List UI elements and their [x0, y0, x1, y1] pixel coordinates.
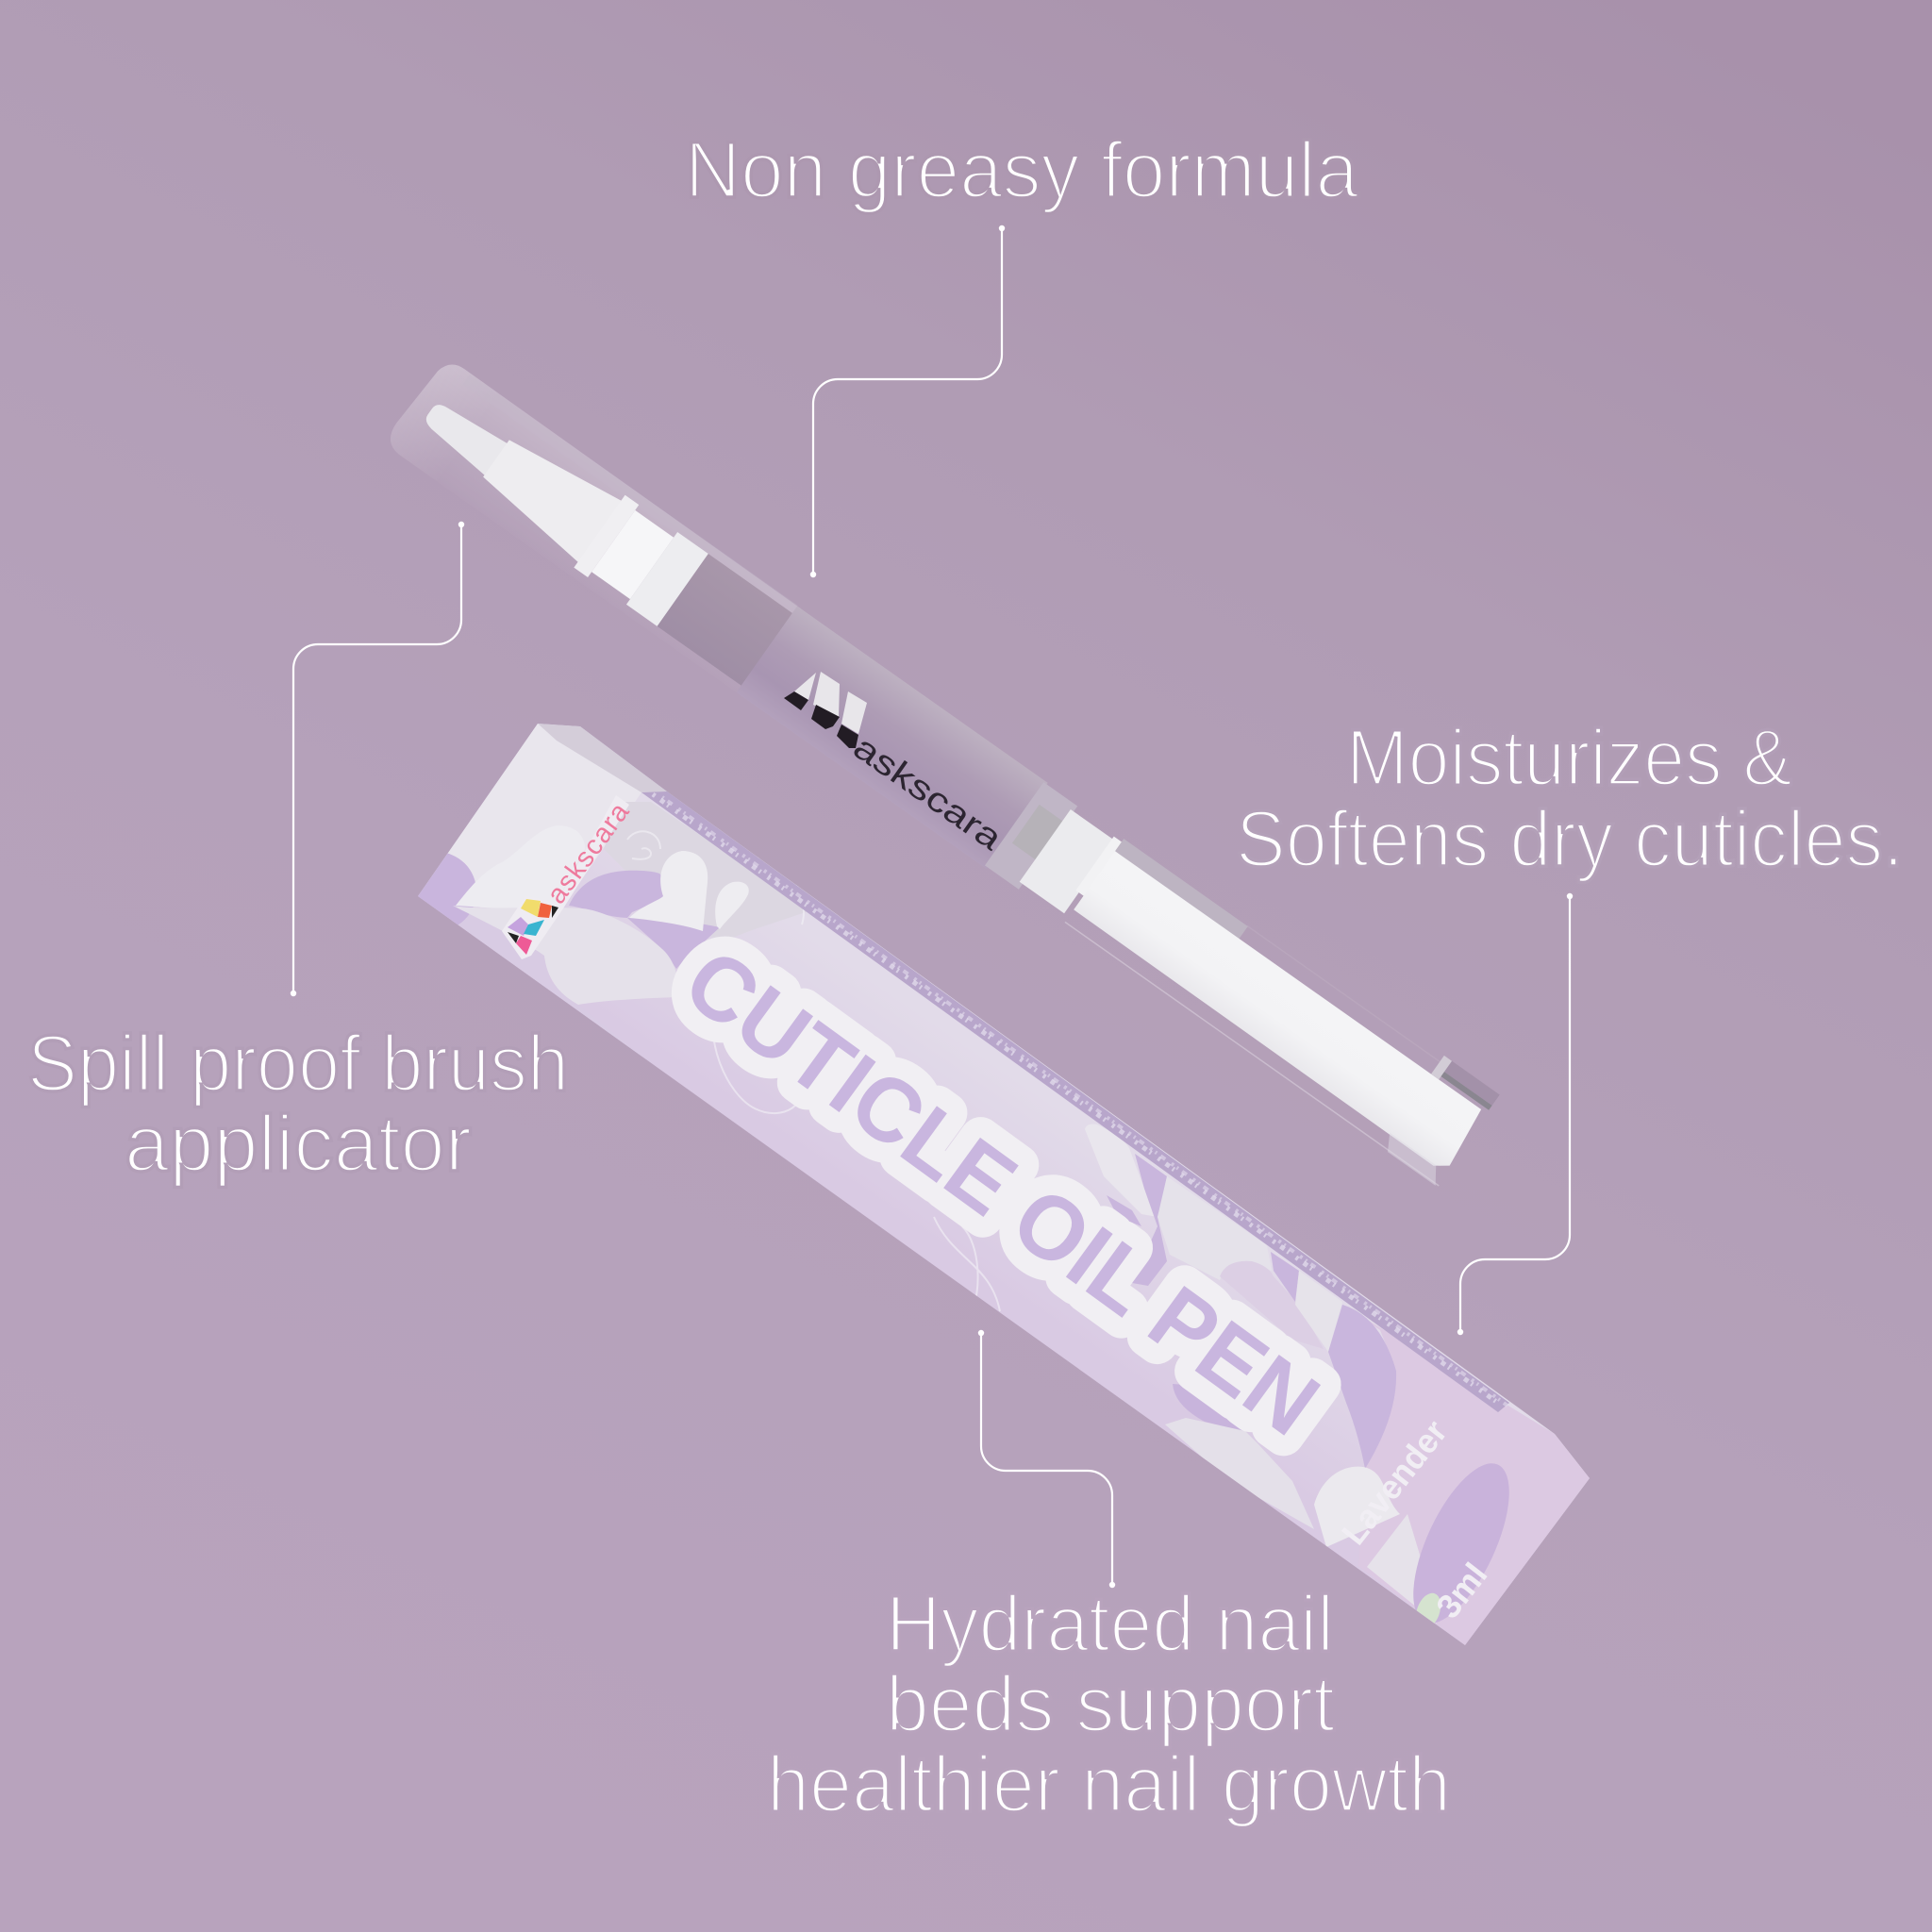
pen upper translucent strip: [1110, 839, 1248, 945]
callout text: hydrated nail beds: Hydrated nail: [886, 1579, 1334, 1668]
pen lower outline: [1065, 922, 1439, 1186]
leader line: spill proof brush: [291, 522, 464, 996]
pen clear section: [985, 782, 1077, 890]
box glitter strip: [641, 791, 1509, 1412]
callout text: moisturizes and softens: Softens dry cuticles.: [1236, 794, 1904, 883]
pen brush tip: [418, 396, 510, 477]
brand name: askscara: [541, 797, 636, 909]
pen white tube: [1073, 851, 1487, 1174]
box label: lavender: Lavender: [1334, 1413, 1455, 1552]
pen brand text: askscara: [846, 727, 1010, 858]
pen logo mark: [784, 672, 867, 748]
pen flange: [574, 495, 639, 577]
pen thread: [626, 532, 708, 626]
leader line: moisturizes: [1457, 893, 1573, 1335]
pen end fitting: [1380, 1133, 1445, 1186]
cap upper highlight: [463, 375, 798, 615]
box title: cuticle oil pen: CUTICLE OIL PEN: [667, 929, 1337, 1455]
pen white band: [1020, 809, 1115, 913]
callout text: spill proof brush applicator: [27, 1019, 569, 1188]
box front face: [418, 724, 1590, 1645]
pen end slit: [1431, 1056, 1500, 1113]
box artwork shapes: [397, 724, 1590, 1645]
cuticle oil pen: [382, 352, 1502, 1188]
callout text: hydrated nail beds: [767, 1579, 1451, 1828]
callout text: non greasy formula: Non greasy formula: [685, 125, 1358, 214]
pen collar: [475, 427, 623, 563]
leader line: non greasy formula: [810, 225, 1005, 577]
pen clear cap: [382, 355, 802, 695]
product box: [397, 724, 1590, 1645]
pen neck: [591, 510, 674, 599]
leader line: hydrated nail beds: [978, 1330, 1115, 1588]
callout text: moisturizes and softens: Moisturizes &: [1346, 713, 1792, 802]
pen inner grey section: [658, 554, 793, 686]
box label: 3ml: 3ml: [1428, 1556, 1494, 1625]
callout text: spill proof brush applicator: applicator: [125, 1099, 472, 1188]
callout text: hydrated nail beds: beds support: [886, 1659, 1335, 1748]
callout text: hydrated nail beds: healthier nail growth: [767, 1740, 1451, 1828]
box brand logo: [502, 795, 636, 959]
pen body: [737, 607, 1048, 869]
cap end glow: [382, 355, 502, 483]
callout text: moisturizes and softens: [1236, 713, 1904, 883]
callout text: spill proof brush applicator: Spill proof brush: [27, 1019, 569, 1108]
